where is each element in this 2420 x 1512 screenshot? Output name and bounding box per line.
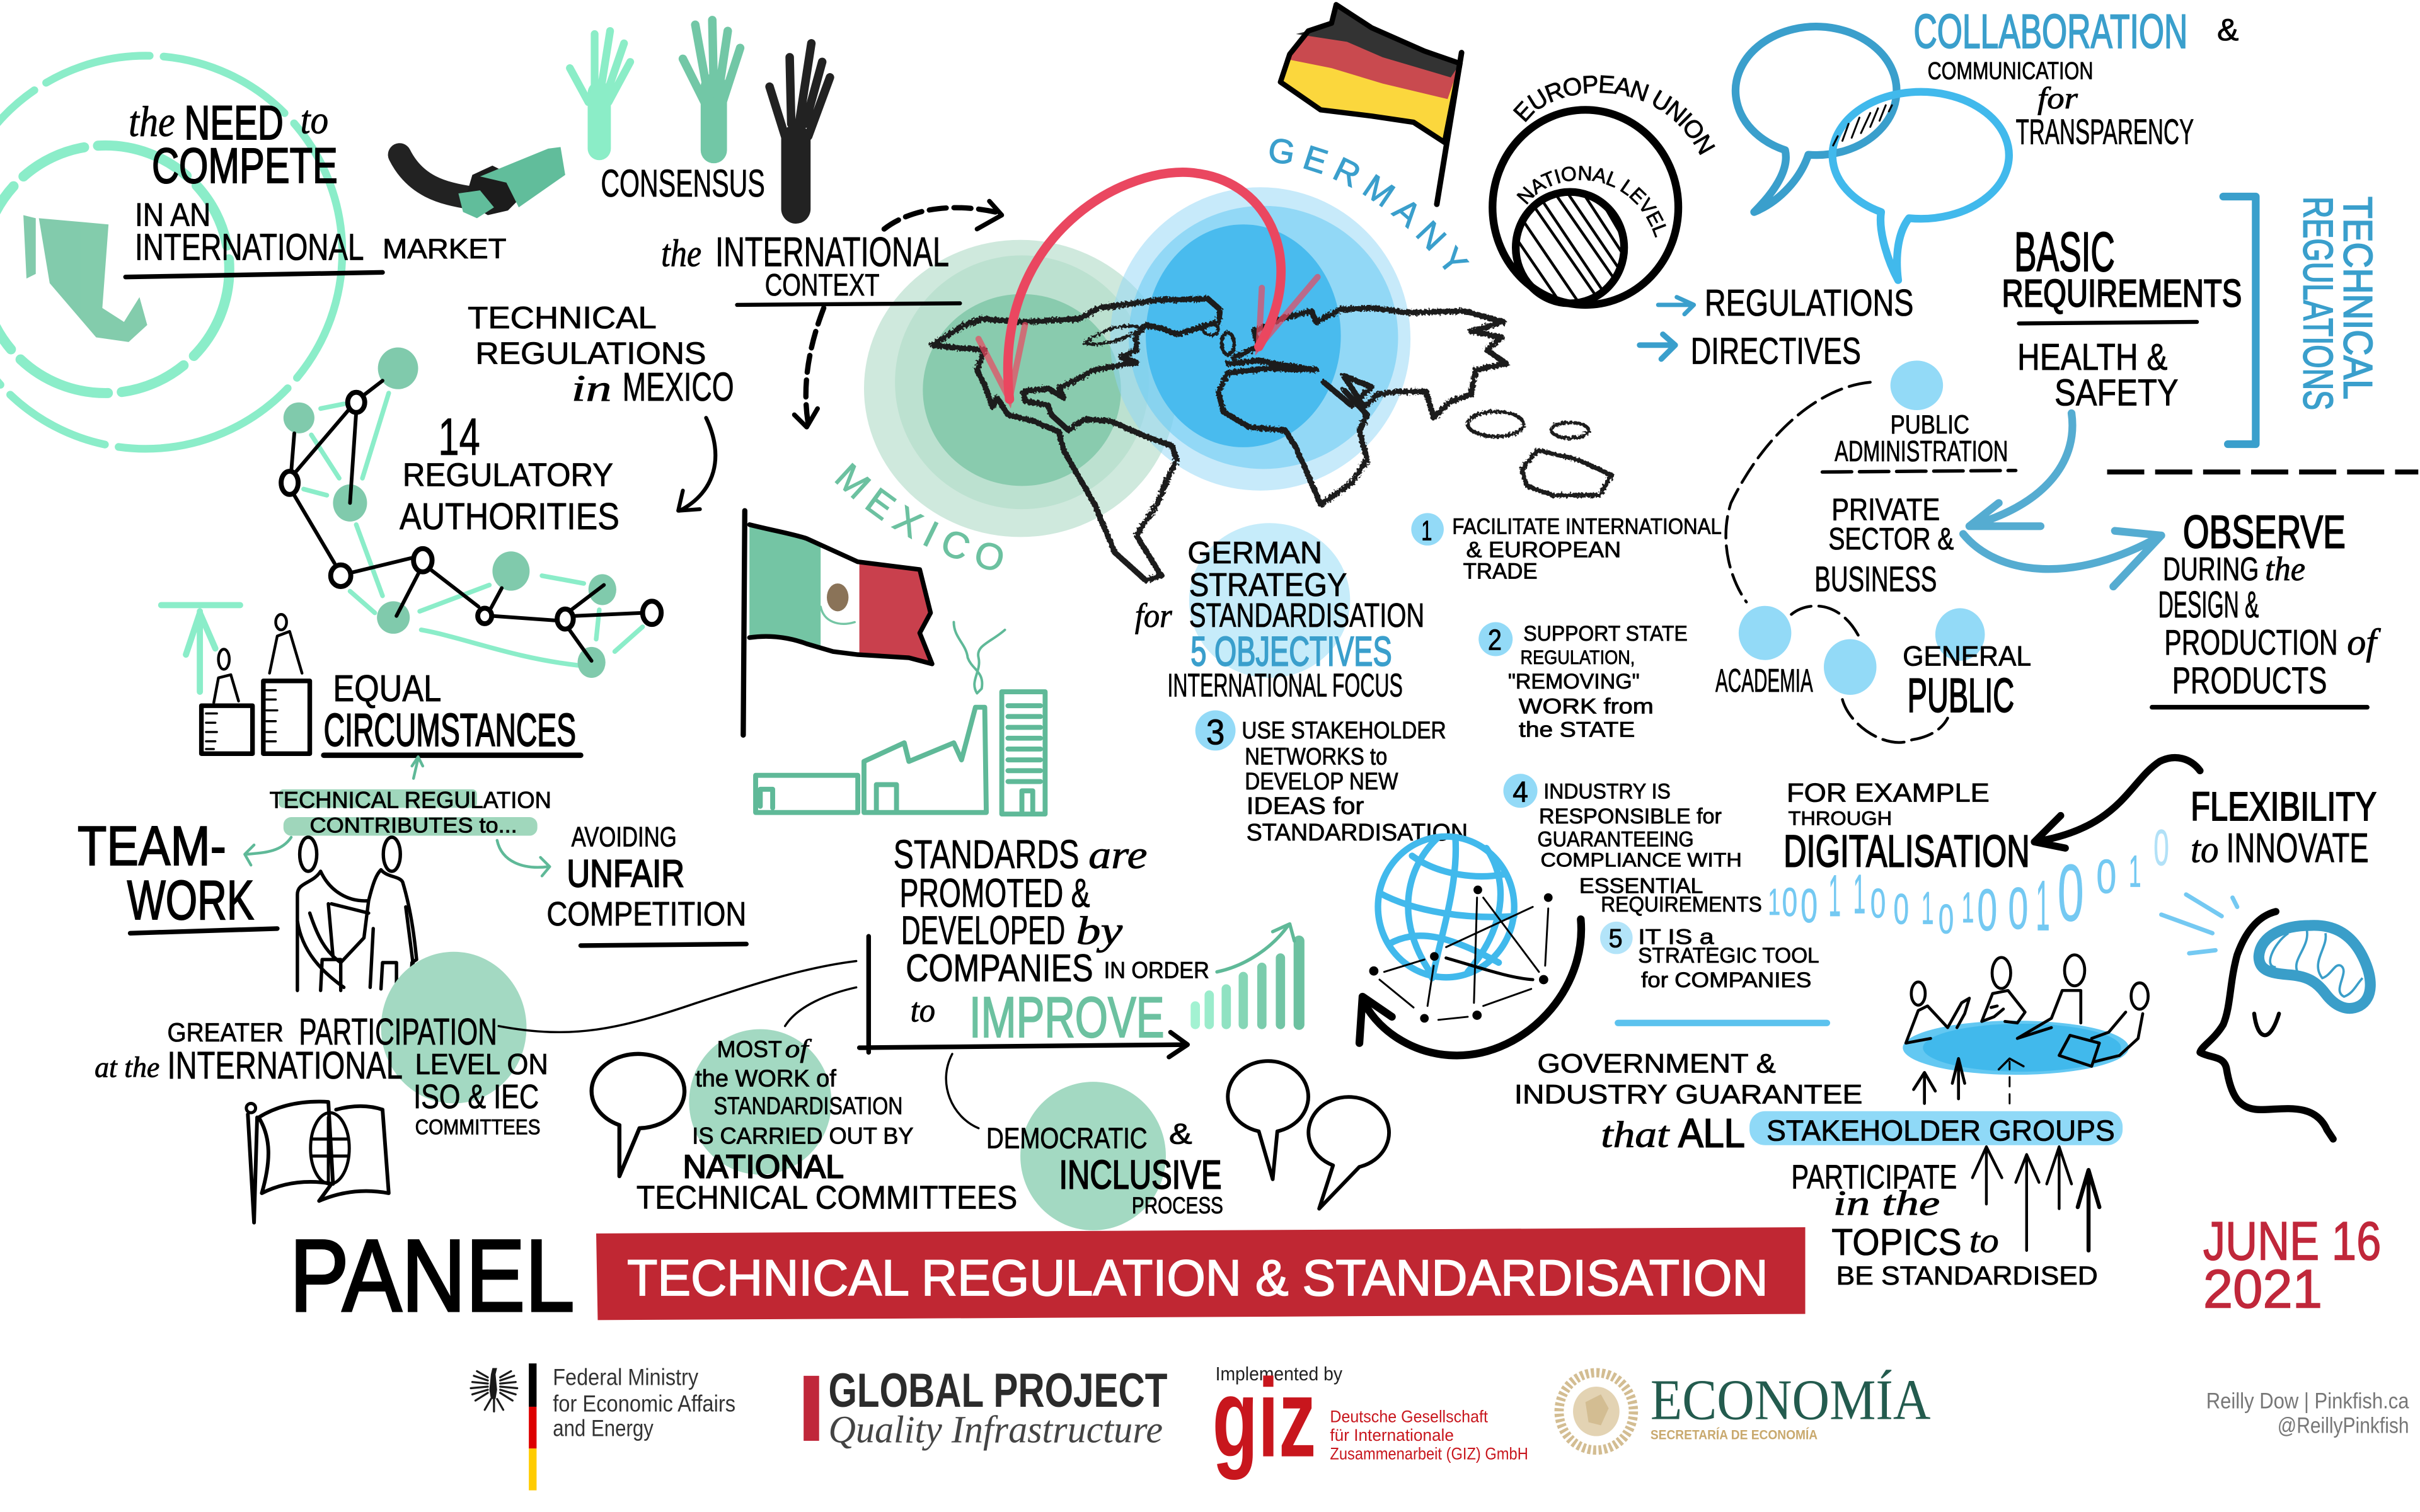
map circle: Germany blue bbox=[1110, 187, 1410, 491]
text: avoiding unfair competition: AVOIDING bbox=[572, 822, 677, 853]
heading: the international context bbox=[661, 229, 960, 305]
binary digits stream: 1 bbox=[1768, 882, 1780, 923]
label: technical regulations vertical: TECHNICAL bbox=[2335, 197, 2380, 399]
chart: rising green bars bbox=[1196, 941, 1299, 1024]
text: technical regulation contributes to: TECHNICAL REGULATION bbox=[270, 787, 551, 813]
objective 4: ESSENTIAL bbox=[1579, 874, 1703, 898]
arrows: green contribution arrows bbox=[245, 757, 550, 876]
highlight circle bbox=[1189, 523, 1350, 678]
label: technical regulations vertical: REGULATIONS bbox=[2295, 197, 2341, 410]
text: most of the work: of bbox=[785, 1034, 812, 1063]
text: standards are promoted and developed: are bbox=[1088, 832, 1148, 877]
binary digits stream: 0 bbox=[2058, 849, 2084, 939]
binary digits stream: 0 bbox=[1801, 879, 1818, 933]
text: equal circumstances: CIRCUMSTANCES bbox=[324, 704, 576, 756]
text: democratic and inclusive process bbox=[986, 1117, 1223, 1218]
heading: German strategy for standardisation: STANDARDISATION bbox=[1189, 597, 1424, 634]
icon: green factory bbox=[756, 622, 1045, 814]
panel: greater participation bbox=[95, 952, 856, 1223]
heading: German strategy for standardisation: 5 OBJECTIVES bbox=[1190, 628, 1392, 675]
arrow head bbox=[794, 409, 817, 427]
panel: stakeholders bbox=[1715, 360, 2382, 743]
text: basic requirements: SAFETY bbox=[2054, 373, 2179, 414]
arrow: to regulations bbox=[1658, 297, 1694, 314]
text: technical regulations in Mexico: in bbox=[572, 367, 612, 409]
text: greater participation at the international level: at the bbox=[95, 1051, 159, 1084]
text: observe during the design and production: OBSERVE bbox=[2183, 506, 2346, 558]
icon: flag with globe bbox=[246, 1102, 389, 1223]
text: participate in the topics: TOPICS bbox=[1831, 1222, 1962, 1263]
bracket bbox=[2223, 197, 2256, 444]
text: 14 regulatory authorities: 14 bbox=[438, 407, 480, 466]
binary digits stream: 1 bbox=[1828, 863, 1841, 929]
arrow head bbox=[1999, 1058, 2024, 1069]
text: greater participation at the international level bbox=[95, 1012, 548, 1140]
arrow: flexibility to digitalisation bbox=[2034, 758, 2200, 848]
credit: Reilly Dow Pinkfish bbox=[2206, 1388, 2409, 1438]
text: flexibility to innovate: FLEXIBILITY bbox=[2191, 784, 2377, 829]
panel: technical regulations in Mexico network bbox=[281, 301, 734, 678]
text: 14 regulatory authorities: REGULATORY bbox=[403, 456, 613, 493]
icon: idea rays bbox=[2162, 895, 2237, 953]
arrow: thick up arrow bbox=[2078, 1170, 2099, 1251]
heading: German strategy for standardisation: GERMAN bbox=[1187, 536, 1322, 570]
objective 2: 2 bbox=[1488, 624, 1502, 656]
map circle: Mexico green bbox=[864, 240, 1177, 537]
panel: standards are promoted bbox=[860, 832, 1299, 1057]
text: observe during the design and production: DESIGN & bbox=[2158, 585, 2259, 626]
text: participate in the topics bbox=[1791, 1159, 2098, 1290]
text: participate in the topics: to bbox=[1969, 1221, 1999, 1260]
text: participate in the topics: in the bbox=[1833, 1184, 1940, 1223]
icon: Mexican seal bbox=[1559, 1373, 1634, 1450]
connector: national committees to standards bbox=[785, 987, 856, 1026]
binary digits stream: 0 bbox=[2153, 820, 2169, 876]
text: for example through digitalisation: DIGITALISATION bbox=[1783, 827, 2030, 877]
binary digits stream: 1 bbox=[2036, 866, 2050, 945]
dashed arcs linking stakeholders bbox=[1726, 382, 1948, 743]
connector: participation to standards bbox=[498, 961, 856, 1032]
text: greater participation at the international level: COMMITTEES bbox=[415, 1116, 541, 1140]
objective 5 bbox=[1600, 922, 1819, 992]
objective 4: 4 bbox=[1512, 775, 1528, 808]
text: standards are promoted and developed: PROMOTED & bbox=[899, 871, 1090, 916]
arrow: black circular arrow bbox=[1359, 919, 1581, 1055]
heading: collaboration and communication for transparency: COMMUNICATION bbox=[1928, 57, 2093, 84]
panel: basic requirements technical regulations bbox=[2002, 197, 2418, 472]
binary digits stream: 1 bbox=[1853, 862, 1865, 925]
icon: mint arrow to target line bbox=[161, 605, 240, 692]
binary digits stream: 1 bbox=[1922, 882, 1933, 934]
text: ministry name: Federal Ministry bbox=[553, 1365, 699, 1390]
icon: two people on podiums bbox=[202, 614, 310, 753]
icon: brain bbox=[2259, 925, 2370, 1009]
text: standards are promoted and developed: STANDARDS bbox=[894, 832, 1079, 877]
highlight circle bbox=[381, 952, 526, 1103]
panel: consensus and raised hands bbox=[570, 20, 830, 209]
text: for example through digitalisation: THROUGH bbox=[1789, 806, 1892, 829]
panel: the international context bbox=[661, 201, 1002, 427]
icon: Mexican flag bbox=[743, 511, 932, 735]
text: participate in the topics: PARTICIPATE bbox=[1791, 1159, 1957, 1196]
highlight bars bbox=[279, 789, 538, 836]
text: participate in the topics: BE STANDARDISED bbox=[1836, 1261, 2098, 1290]
arrows: up to table bbox=[1913, 1058, 1965, 1103]
label: general public: PUBLIC bbox=[1908, 669, 2014, 723]
panel: head with brain bbox=[2162, 895, 2370, 1139]
binary digits stream: 0 bbox=[1939, 896, 1954, 942]
icon: meeting table bbox=[1903, 1021, 2129, 1075]
text: private sector and business: SECTOR & bbox=[1828, 522, 1954, 556]
objective 1: & EUROPEAN bbox=[1466, 537, 1621, 562]
objective 5: IT IS a bbox=[1638, 925, 1715, 949]
label: general public bbox=[1903, 641, 2031, 723]
objective 1: 1 bbox=[1421, 515, 1432, 546]
panel: German strategy bbox=[1135, 513, 1819, 992]
icon: network over globe bbox=[1369, 886, 1553, 1022]
logo: Federal Ministry for Economic Affairs and Energy bbox=[471, 1363, 735, 1491]
icon: speech bubble left bbox=[1736, 26, 1896, 212]
arrow: growth trend bbox=[1217, 924, 1294, 972]
heading: the need to compete: INTERNATIONAL bbox=[135, 227, 364, 268]
objective 4: GUARANTEEING bbox=[1538, 828, 1694, 852]
text: public administration: PUBLIC bbox=[1891, 410, 1969, 439]
objective 4: INDUSTRY IS bbox=[1543, 780, 1671, 804]
objective 3: USE STAKEHOLDER bbox=[1242, 718, 1446, 744]
label: general public: GENERAL bbox=[1903, 641, 2031, 672]
date: June 16 2021: JUNE 16 bbox=[2203, 1211, 2381, 1272]
panel: European Union and national level bbox=[1489, 75, 1715, 309]
text: flexibility to innovate: to bbox=[2191, 828, 2218, 871]
text: standards are promoted and developed: to bbox=[911, 991, 935, 1029]
icon: green hand bbox=[683, 20, 740, 150]
text: private sector and business: BUSINESS bbox=[1814, 559, 1937, 598]
label: regulations: REGULATIONS bbox=[1705, 283, 1913, 324]
text: private sector and business bbox=[1814, 493, 1954, 598]
icon: head profile bbox=[2200, 912, 2333, 1139]
arrows: up to stakeholder groups bbox=[1973, 1147, 2071, 1251]
logo: giz: Implemented by bbox=[1216, 1363, 1343, 1385]
panel: equal circumstances bbox=[161, 605, 580, 756]
text: government and industry guarantee: that bbox=[1601, 1113, 1670, 1155]
logo: Secretaría de Economía: SECRETARÍA DE ECONOMÍA bbox=[1651, 1428, 1818, 1443]
objective 3: DEVELOP NEW bbox=[1245, 769, 1398, 795]
heading: the need to compete: COMPETE bbox=[152, 138, 338, 193]
heading: collaboration and communication for transparency bbox=[1913, 5, 2238, 151]
objective 1 bbox=[1411, 513, 1722, 584]
label: consensus: CONSENSUS bbox=[601, 162, 765, 205]
heading: the need to compete: MARKET bbox=[383, 234, 507, 265]
banner: technical regulation and standardisation bbox=[596, 1227, 1806, 1320]
divider line bbox=[1618, 1022, 1827, 1024]
text: standards are promoted and developed: COMPANIES bbox=[906, 946, 1093, 990]
text: 14 regulatory authorities bbox=[400, 407, 619, 537]
text: basic requirements bbox=[2002, 220, 2242, 414]
icon: two people shaking hands bbox=[297, 837, 417, 990]
text: most of the work: MOST bbox=[717, 1036, 782, 1062]
objective 2: WORK from bbox=[1519, 694, 1654, 718]
text: ministry name: and Energy bbox=[553, 1416, 654, 1441]
objective 2: "REMOVING" bbox=[1508, 670, 1640, 694]
binary digits stream bbox=[1768, 820, 2169, 945]
objective 2: SUPPORT STATE bbox=[1523, 622, 1688, 646]
objective 2: REGULATION, bbox=[1521, 646, 1635, 668]
objective 3: STANDARDISATION bbox=[1247, 820, 1468, 846]
text: standards are promoted and developed bbox=[894, 832, 1209, 1050]
logo: giz: Deutsche Gesellschaft bbox=[1330, 1407, 1488, 1426]
objective 1: FACILITATE INTERNATIONAL bbox=[1452, 513, 1722, 539]
logo: giz: für Internationale bbox=[1330, 1426, 1454, 1445]
heading: collaboration and communication for transparency: & bbox=[2217, 13, 2238, 47]
logo: giz: giz bbox=[1213, 1356, 1316, 1480]
binary digits stream: 0 bbox=[1782, 879, 1797, 925]
text: most of the work bbox=[637, 1034, 1017, 1216]
text: avoiding unfair competition: UNFAIR bbox=[567, 852, 684, 896]
heading: the need to compete: the bbox=[129, 98, 175, 146]
arrow: dashed to Mexico flag bbox=[806, 308, 824, 424]
stakeholder circles bbox=[1739, 360, 1985, 695]
objective 3: NETWORKS to bbox=[1245, 744, 1387, 770]
objective 3: 3 bbox=[1206, 713, 1224, 752]
map: continents bbox=[932, 299, 1611, 580]
icon: black hand bbox=[769, 43, 830, 209]
icon: federal eagle bbox=[471, 1368, 517, 1411]
panel: regulations and directives bbox=[1640, 283, 1913, 372]
logo: Global Project Quality Infrastructure: GLOBAL PROJECT bbox=[828, 1364, 1167, 1418]
heading: collaboration and communication for transparency: COLLABORATION bbox=[1913, 5, 2187, 59]
connector bbox=[946, 1054, 979, 1128]
objective 2 bbox=[1478, 622, 1688, 742]
binary digits stream: 0 bbox=[2096, 850, 2116, 903]
chart: network of authorities bbox=[281, 347, 661, 678]
text: technical regulation contributes to bbox=[270, 787, 551, 838]
text: greater participation at the international level: INTERNATIONAL bbox=[168, 1044, 403, 1087]
icon: national level circle bbox=[1516, 192, 1624, 303]
icon: mint hand bbox=[570, 31, 630, 149]
heading: the international context: the bbox=[661, 232, 701, 275]
text: standards are promoted and developed: by bbox=[1076, 908, 1123, 953]
text: greater participation at the international level: GREATER bbox=[168, 1017, 284, 1047]
highlight circle bbox=[1020, 1082, 1166, 1230]
heading: the international context: CONTEXT bbox=[765, 268, 880, 302]
heading: German strategy for standardisation: INTERNATIONAL FOCUS bbox=[1167, 667, 1403, 703]
arrow: red arc between Mexico and Germany bbox=[979, 172, 1318, 399]
heading: German strategy for standardisation: for bbox=[1135, 597, 1173, 634]
panel: the need to compete bbox=[0, 55, 565, 449]
icon: dashed target rings bbox=[0, 55, 342, 449]
text: observe during the design and production: of bbox=[2347, 621, 2382, 663]
text: standards are promoted and developed: IMPROVE bbox=[969, 986, 1165, 1050]
panel: most of the work of standardisation bbox=[592, 1029, 1017, 1216]
heading: collaboration and communication for transparency: for bbox=[2037, 81, 2078, 115]
objective 5: for COMPANIES bbox=[1641, 968, 1811, 992]
text: standards are promoted and developed: DEVELOPED bbox=[901, 907, 1065, 953]
flag bar bbox=[529, 1363, 536, 1491]
objective 4: REQUIREMENTS bbox=[1601, 893, 1762, 917]
title: panel: PANEL bbox=[290, 1219, 575, 1333]
icon: speech bubble two bbox=[1308, 1097, 1389, 1209]
arrow head bbox=[977, 201, 1002, 229]
panel: government and industry guarantee bbox=[1359, 837, 2148, 1290]
icon: eye bbox=[2254, 1014, 2279, 1035]
text: technical regulations in Mexico: MEXICO bbox=[623, 364, 734, 410]
text: 14 regulatory authorities: AUTHORITIES bbox=[400, 496, 619, 537]
text: greater participation at the international level: ISO & IEC bbox=[413, 1078, 539, 1116]
icon: people around table bbox=[1906, 955, 2148, 1067]
text: ministry name bbox=[553, 1365, 735, 1441]
icon: handshake bbox=[400, 147, 565, 218]
label: directives: DIRECTIVES bbox=[1691, 331, 1861, 372]
objective 5: STRATEGIC TOOL bbox=[1638, 944, 1819, 968]
logo: Global Project Quality Infrastructure: Quality Infrastructure bbox=[828, 1408, 1163, 1451]
label: Germany: GERMANY bbox=[1269, 139, 1470, 270]
logo: Global Project Quality Infrastructure bbox=[804, 1364, 1167, 1451]
heading: the need to compete: to bbox=[301, 97, 328, 142]
text: for example through digitalisation bbox=[1783, 777, 2030, 877]
text: flexibility to innovate bbox=[2191, 784, 2377, 871]
logo: giz: Zusammenarbeit (GIZ) GmbH bbox=[1330, 1444, 1528, 1463]
text: democratic and inclusive process: & bbox=[1169, 1117, 1192, 1150]
icon: German flag bbox=[1281, 4, 1461, 204]
panel: digitalisation and flexibility bbox=[1768, 758, 2377, 945]
label: academia: ACADEMIA bbox=[1715, 662, 1813, 699]
binary digits stream: 0 bbox=[1894, 885, 1909, 934]
text: government and industry guarantee: ALL bbox=[1678, 1110, 1745, 1155]
objective 4: RESPONSIBLE for bbox=[1539, 805, 1722, 828]
text: technical regulation contributes to: CONTRIBUTES to... bbox=[310, 814, 517, 838]
text: basic requirements: REQUIREMENTS bbox=[2002, 272, 2242, 315]
heading: the need to compete: IN AN bbox=[135, 197, 210, 233]
arrow: to regulatory authorities bbox=[678, 418, 715, 511]
arrow: private sector to observe bbox=[1963, 531, 2162, 587]
label: technical regulations vertical bbox=[2295, 197, 2380, 410]
binary digits stream: 0 bbox=[1977, 877, 1997, 942]
date: June 16 2021 bbox=[2203, 1211, 2381, 1320]
panel: democratic and inclusive process bbox=[946, 1054, 1389, 1230]
logo: Secretaría de Economía bbox=[1559, 1368, 1931, 1450]
text: observe during the design and production: DURING bbox=[2163, 551, 2259, 587]
text: greater participation at the international level: PARTICIPATION bbox=[299, 1012, 497, 1053]
text: observe during the design and production: PRODUCTS bbox=[2172, 661, 2327, 702]
objective 3 bbox=[1196, 711, 1468, 846]
logo: Secretaría de Economía: ECONOMÍA bbox=[1651, 1368, 1931, 1432]
text: avoiding unfair competition: COMPETITION bbox=[546, 895, 746, 933]
text: most of the work: the WORK of bbox=[695, 1065, 836, 1092]
banner: technical regulation and standardisation: TECHNICAL REGULATION & STANDARDISATION bbox=[627, 1250, 1768, 1307]
text: private sector and business: PRIVATE bbox=[1831, 493, 1940, 527]
icon: speech bubble right bbox=[1833, 92, 2009, 280]
binary digits stream: 0 bbox=[1870, 881, 1886, 927]
text: standards are promoted and developed: IN ORDER bbox=[1104, 958, 1209, 983]
text: observe during the design and production bbox=[2152, 506, 2382, 707]
objective 4: COMPLIANCE WITH bbox=[1540, 849, 1742, 871]
text: for example through digitalisation: FOR EXAMPLE bbox=[1787, 777, 1990, 807]
text: basic requirements: BASIC bbox=[2014, 220, 2115, 283]
text: government and industry guarantee: GOVERNMENT & bbox=[1538, 1048, 1776, 1079]
label pill: stakeholder groups: STAKEHOLDER GROUPS bbox=[1766, 1114, 2115, 1147]
icon: EU circle bbox=[1492, 110, 1678, 305]
text: ministry name: for Economic Affairs bbox=[553, 1390, 735, 1416]
text: government and industry guarantee bbox=[1514, 1048, 1862, 1155]
text: public administration bbox=[1823, 410, 2016, 472]
panel: technical regulation contributes to bbox=[78, 757, 746, 990]
text: democratic and inclusive process: INCLUSIVE bbox=[1059, 1152, 1221, 1198]
text: observe during the design and production: PRODUCTION bbox=[2164, 622, 2338, 662]
icon: speech bubble bbox=[592, 1054, 684, 1176]
axes arrow bbox=[860, 936, 1187, 1057]
text: public administration: ADMINISTRATION bbox=[1835, 435, 2008, 467]
panel: world map Mexico and Germany bbox=[834, 139, 1615, 584]
date: June 16 2021: 2021 bbox=[2203, 1259, 2322, 1320]
arrow: to directives bbox=[1640, 335, 1675, 359]
text: observe during the design and production: the bbox=[2265, 550, 2305, 588]
logo: giz bbox=[1213, 1356, 1528, 1480]
text: greater participation at the international level: LEVEL ON bbox=[415, 1048, 548, 1080]
text: government and industry guarantee: INDUSTRY GUARANTEE bbox=[1514, 1079, 1862, 1109]
heading: German strategy for standardisation bbox=[1135, 536, 1424, 703]
heading: the need to compete bbox=[125, 96, 507, 277]
icon: speech bubble one bbox=[1228, 1061, 1308, 1179]
heading: the need to compete: NEED bbox=[185, 96, 284, 150]
text: most of the work: TECHNICAL COMMITTEES bbox=[637, 1179, 1017, 1216]
text: most of the work: IS CARRIED OUT BY bbox=[692, 1123, 914, 1148]
heading: the international context: INTERNATIONAL bbox=[715, 229, 949, 276]
arrow: dashed up to table bbox=[2009, 1062, 2010, 1103]
text: technical regulations in Mexico: REGULATIONS bbox=[475, 336, 706, 370]
text: equal circumstances bbox=[324, 668, 580, 756]
text: most of the work: STANDARDISATION bbox=[714, 1092, 902, 1120]
icon: globe bbox=[1378, 837, 1514, 978]
objective 4 bbox=[1504, 774, 1762, 917]
label: European Union: EUROPEAN UNION bbox=[1512, 75, 1715, 155]
hatching bbox=[1519, 195, 1620, 299]
binary digits stream: 1 bbox=[2129, 847, 2141, 897]
objective 3: IDEAS for bbox=[1247, 793, 1364, 820]
text: democratic and inclusive process: DEMOCRATIC bbox=[986, 1122, 1148, 1155]
icon: map of Mexico bbox=[23, 215, 147, 342]
text: avoiding unfair competition bbox=[546, 822, 746, 946]
text: democratic and inclusive process: PROCESS bbox=[1132, 1193, 1223, 1218]
text: most of the work: NATIONAL bbox=[683, 1148, 844, 1184]
text: teamwork: WORK bbox=[127, 869, 254, 931]
text: equal circumstances: EQUAL bbox=[333, 668, 441, 709]
objective 1: TRADE bbox=[1463, 559, 1538, 584]
label: Mexico: MEXICO bbox=[834, 462, 1003, 570]
text: teamwork bbox=[78, 815, 277, 933]
binary digits stream: 1 bbox=[1962, 883, 1974, 932]
label: national level: NATIONAL LEVEL bbox=[1516, 166, 1666, 238]
binary digits stream: 0 bbox=[2008, 876, 2028, 941]
text: technical regulations in Mexico bbox=[468, 301, 734, 410]
text: basic requirements: HEALTH & bbox=[2017, 337, 2167, 378]
heading: collaboration and communication for transparency: TRANSPARENCY bbox=[2016, 112, 2194, 151]
hatching between bubbles bbox=[1833, 105, 1892, 146]
highlight circle bbox=[689, 1029, 831, 1174]
arrow: health and safety to private sector bbox=[1969, 413, 2072, 526]
heading: German strategy for standardisation: STRATEGY bbox=[1189, 566, 1347, 603]
text: teamwork: TEAM- bbox=[78, 815, 226, 877]
text: technical regulations in Mexico: TECHNICAL bbox=[468, 301, 657, 335]
panel: collaboration and communication bbox=[1736, 5, 2238, 280]
objective 5: 5 bbox=[1609, 923, 1623, 953]
arrow: dashed to world map bbox=[884, 208, 996, 229]
divider dashed bbox=[2107, 471, 2418, 473]
objective 2: the STATE bbox=[1519, 718, 1635, 742]
